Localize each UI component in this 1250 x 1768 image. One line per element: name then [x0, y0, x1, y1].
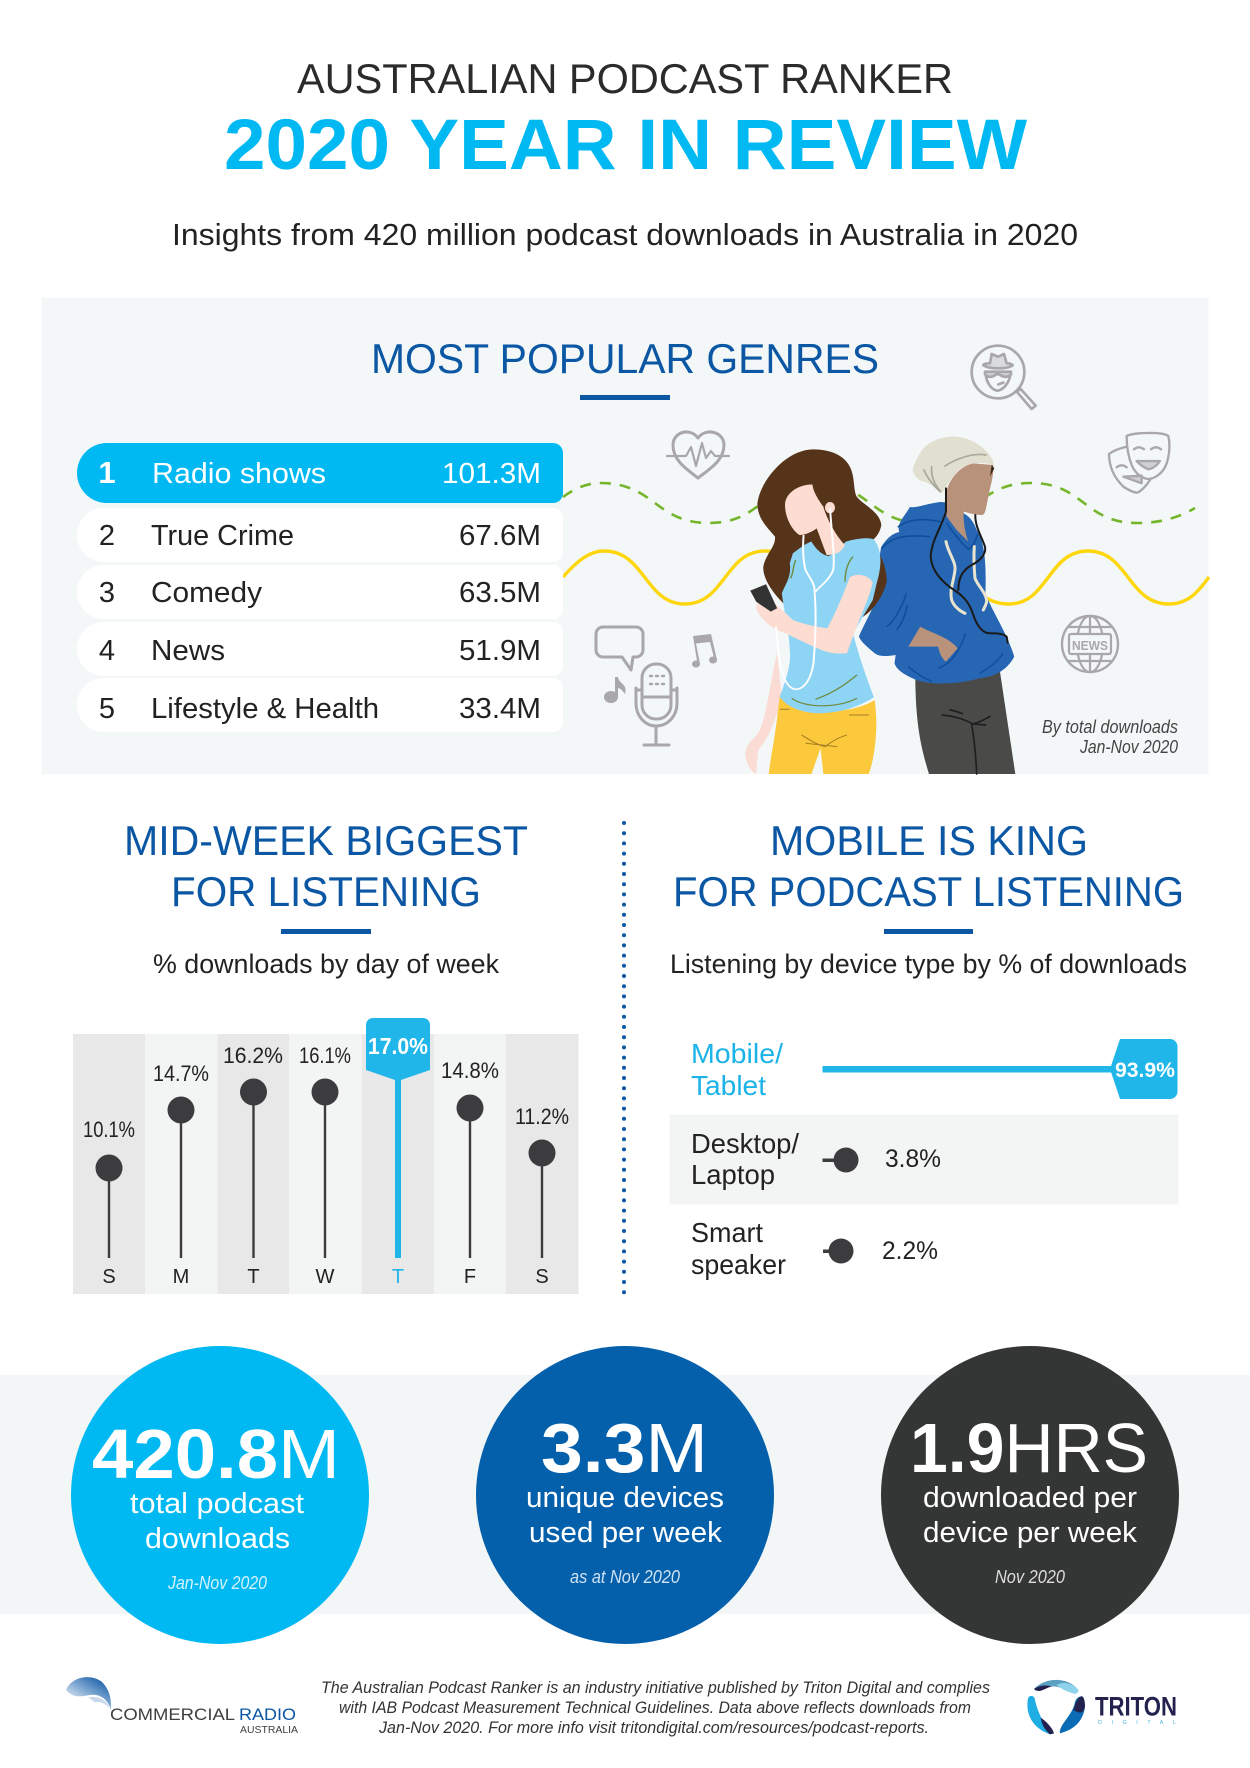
icon: speech bubble [596, 627, 643, 670]
smart speaker row: 2.2% [882, 1237, 938, 1265]
stat: unique devices: used per week [529, 1517, 722, 1549]
title block [172, 55, 1078, 252]
stat: total downloads: 420.8M [92, 1415, 340, 1493]
logo: Commercial Radio Australia [66, 1677, 298, 1736]
stat: total downloads: Jan-Nov 2020 [167, 1573, 267, 1593]
mobile heading: FOR PODCAST LISTENING [673, 868, 1184, 915]
day values: 14.8% [441, 1058, 499, 1083]
footer note [321, 1678, 990, 1737]
chart: device share [670, 1038, 1178, 1280]
row 3 comedy [77, 565, 563, 619]
desktop row: 3.8% [885, 1145, 941, 1173]
stat: unique devices: as at Nov 2020 [570, 1567, 680, 1587]
day letters: W [316, 1266, 335, 1288]
mobile row [691, 1038, 1178, 1101]
sound waves [563, 483, 1209, 604]
mid-week heading: FOR LISTENING [171, 868, 481, 915]
hair [757, 449, 887, 617]
logo: Triton Digital: DIGITAL [1098, 1720, 1176, 1726]
genres heading: MOST POPULAR GENRES [371, 335, 879, 382]
icon: theatre masks [1109, 433, 1169, 492]
mid-week heading: MID-WEEK BIGGEST [124, 817, 528, 864]
day letters: T [392, 1266, 404, 1288]
mobile row: 93.9% [1115, 1059, 1175, 1082]
icon: news globe: NEWS [1072, 638, 1108, 653]
row 1 radio shows: 1 [98, 455, 116, 490]
stat: unique devices: 3.3M [541, 1409, 708, 1487]
mid-week subtitle: % downloads by day of week [153, 949, 499, 979]
stat: total downloads: total podcast [130, 1488, 304, 1520]
stat band [0, 1375, 1250, 1614]
stat: hours per device: 1.9HRS [910, 1409, 1148, 1487]
panel: most popular genres [42, 298, 1209, 774]
smart speaker row: speaker [691, 1249, 786, 1280]
row 4 news [77, 622, 563, 676]
desktop row [670, 1114, 1178, 1204]
logo: Commercial Radio Australia: COMMERCIAL [110, 1706, 235, 1724]
chart: downloads by day of week [73, 1018, 578, 1294]
row 2 true crime: 2 [99, 520, 115, 552]
footer note: with IAB Podcast Measurement Technical Guidelines. Data above reflects downloads from [339, 1698, 971, 1717]
genres source note [1042, 717, 1178, 757]
genres source note: By total downloads [1042, 717, 1178, 737]
row 1 radio shows: 101.3M [442, 458, 541, 490]
row 5 lifestyle and health: 5 [99, 693, 115, 725]
day values [83, 1043, 569, 1142]
day values: 16.2% [223, 1043, 283, 1068]
face and neck [785, 484, 845, 555]
stat: unique devices: unique devices [526, 1482, 724, 1514]
illustration: man listening [859, 437, 1015, 774]
logo: Commercial Radio Australia: AUSTRALIA [240, 1725, 298, 1736]
day letters: S [535, 1266, 549, 1288]
icon: detective magnifier [972, 346, 1036, 409]
mobile subtitle: Listening by device type by % of downloads [670, 949, 1187, 979]
day letters: M [173, 1266, 189, 1288]
section: mid-week listening [73, 817, 578, 1294]
day values: 14.7% [153, 1061, 209, 1086]
desktop row: Laptop [691, 1159, 775, 1190]
mobile heading: MOBILE IS KING [770, 817, 1088, 864]
icon: double music note [692, 634, 717, 668]
row 1 radio shows: Radio shows [152, 458, 326, 490]
stat: hours per device: device per week [923, 1517, 1138, 1549]
day values: 11.2% [515, 1104, 569, 1129]
row 3 comedy: 63.5M [459, 577, 541, 609]
day letters: S [102, 1266, 116, 1288]
hoodie [859, 502, 1014, 684]
mobile row: Tablet [691, 1070, 766, 1101]
highlighted Thursday bar: 17.0% [368, 1033, 428, 1059]
genres source note: Jan-Nov 2020 [1079, 737, 1178, 757]
row 2 true crime: True Crime [151, 520, 294, 552]
trousers [915, 672, 1015, 774]
earphone cable [776, 508, 834, 689]
day letters [102, 1266, 549, 1288]
mobile row: Mobile/ [691, 1038, 783, 1069]
highlighted Thursday bar [366, 1018, 430, 1258]
day letters: T [247, 1266, 260, 1288]
logo: Commercial Radio Australia: RADIO [239, 1706, 296, 1724]
stat: unique devices [476, 1346, 774, 1644]
head, hat and cables [882, 437, 1008, 643]
body [745, 538, 880, 774]
stat: hours per device: Nov 2020 [995, 1567, 1065, 1587]
row 5 lifestyle and health: Lifestyle & Health [151, 693, 379, 725]
icon: microphone [636, 664, 677, 745]
smart speaker row: Smart [691, 1217, 763, 1248]
stat: total downloads [71, 1346, 369, 1644]
genre ranking list [77, 443, 563, 732]
footer note: The Australian Podcast Ranker is an industry initiative published by Triton Digital and complies [321, 1678, 990, 1697]
row 5 lifestyle and health [77, 678, 563, 732]
row 4 news: News [151, 635, 225, 667]
row 3 comedy: 3 [99, 577, 115, 609]
mobile heading [673, 817, 1184, 915]
row 5 lifestyle and health: 33.4M [459, 693, 541, 725]
section: mobile is king [670, 817, 1187, 1280]
desktop row: Desktop/ [691, 1128, 799, 1159]
row 2 true crime [77, 508, 563, 562]
subtitle: Insights from 420 million podcast downloads in Australia in 2020 [172, 217, 1078, 252]
stat: hours per device: downloaded per [923, 1482, 1137, 1514]
logo: Triton Digital [1027, 1680, 1177, 1734]
dotted divider [622, 823, 626, 1299]
smart speaker row [691, 1217, 938, 1280]
day values: 10.1% [83, 1117, 135, 1142]
row 3 comedy: Comedy [151, 577, 262, 609]
mid-week heading [124, 817, 528, 915]
row 4 news: 4 [99, 635, 115, 667]
illustration: woman listening [745, 449, 887, 774]
row 2 true crime: 67.6M [459, 520, 541, 552]
day values: 16.1% [299, 1043, 351, 1068]
icon: heart with pulse [667, 432, 729, 478]
icon: music note [604, 677, 626, 703]
day letters: F [464, 1266, 476, 1288]
stat: hours per device [881, 1346, 1179, 1644]
row 1 radio shows [77, 443, 563, 503]
stat: total downloads: downloads [145, 1523, 290, 1555]
title line 1: AUSTRALIAN PODCAST RANKER [297, 55, 953, 102]
title line 2: 2020 YEAR IN REVIEW [224, 106, 1027, 185]
logo: Triton Digital: TRITON [1095, 1692, 1177, 1722]
row 4 news: 51.9M [459, 635, 541, 667]
footer note: Jan-Nov 2020. For more info visit tritondigital.com/resources/podcast-reports. [378, 1718, 929, 1737]
icon: news globe [1062, 616, 1118, 672]
